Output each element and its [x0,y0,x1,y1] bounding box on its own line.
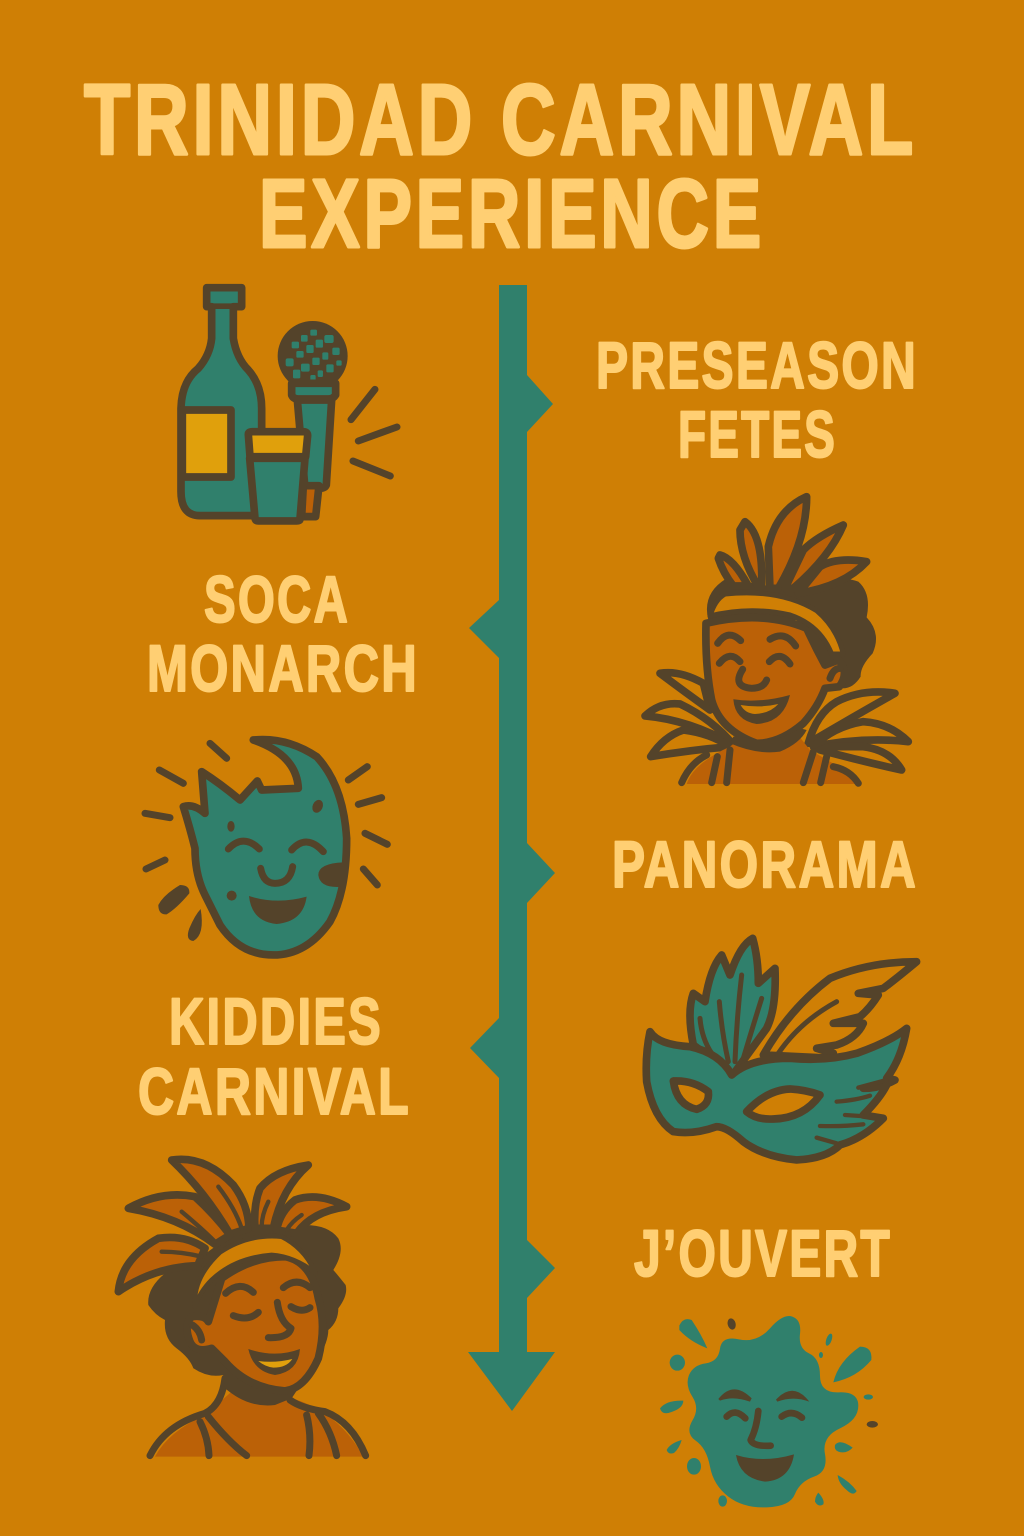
head feathers [118,1159,347,1292]
label: j'ouvert: J’OUVERT [634,1216,892,1290]
label: soca monarch: SOCA [204,562,350,636]
label: preseason fetes: FETES [678,397,837,471]
headband [710,593,843,654]
collar feathers [645,673,908,770]
timeline arrow [468,285,555,1411]
label: soca monarch [147,562,419,705]
icon: bottle, glass and microphone [181,288,397,521]
label: kiddies carnival [138,984,411,1128]
label: preseason fetes [596,328,918,471]
title [84,64,917,268]
icon: paint splash face [660,1316,878,1507]
head feathers [718,497,867,593]
title: EXPERIENCE [259,159,765,268]
smiling face [718,635,840,724]
icon: grinning green mask with sparks [145,740,387,955]
label: soca monarch: MONARCH [147,631,419,705]
headband [195,1236,316,1307]
resting smile face [192,1282,310,1375]
icon: smiling woman with feather headdress [118,1159,366,1457]
label: kiddies carnival: CARNIVAL [138,1054,411,1128]
label: panorama: PANORAMA [612,827,918,901]
label: kiddies carnival: KIDDIES [169,984,383,1058]
icon: smiling performer with feather headdress [645,497,908,784]
icon: feathered carnival mask [646,938,917,1160]
